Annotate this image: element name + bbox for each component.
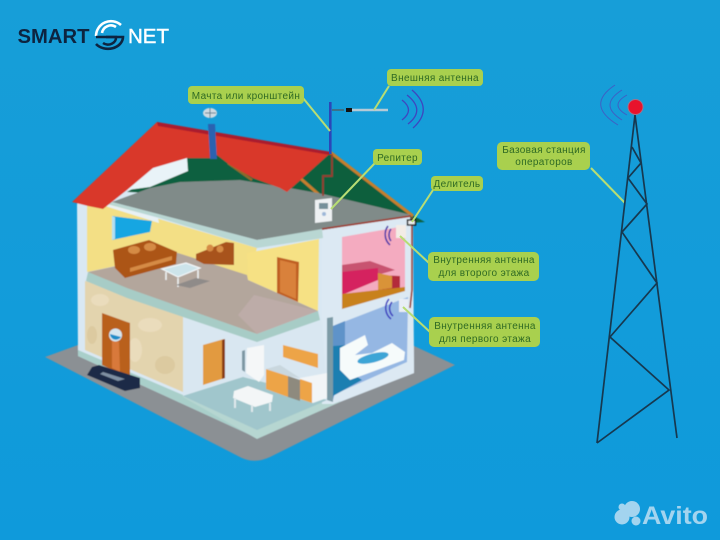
label: mast: Мачта или кронштейн [192,91,300,102]
splitter [408,220,416,225]
front steps [87,365,140,391]
logo: Smart Net: SMART [18,25,90,48]
label: mast [188,86,304,104]
stone wall texture [85,281,183,392]
upper wall door [277,257,299,302]
upper kitchen cabinet [283,345,318,368]
ceiling edge slab [107,202,323,248]
bathroom [333,297,408,400]
kitchen counter [266,365,327,403]
label: first floor antenna: Внутренняя антенна [434,321,536,332]
label: second floor antenna [428,252,539,281]
left wall strip of lower rooms [327,317,333,402]
lower room floor [183,377,327,430]
chimney/mast on roof [203,108,217,159]
sofa [113,240,177,278]
label: external antenna [387,69,483,86]
wifi icon: second floor [385,226,391,245]
cell tower [597,115,677,443]
external mast and antenna [329,102,388,154]
icon: logo G signal mark [96,21,123,49]
label: second floor antenna: для второго этажа [438,268,530,279]
icon: tower beacon [628,100,643,114]
wifi icon: tower signal [601,85,627,125]
lower room back walls [183,313,327,398]
armchair [196,242,234,265]
wifi icon: external antenna [402,90,423,128]
roof underside: attic [127,153,285,195]
label: base station [497,142,590,170]
watermark: Avito: Avito [642,502,708,530]
window [112,216,152,240]
label: repeater: Репитер [377,153,418,164]
coffee table [162,263,210,288]
label: splitter [431,176,483,191]
front door [102,313,130,378]
refrigerator [246,345,264,382]
right wall outer [322,216,414,404]
wifi icon: first floor [386,299,393,319]
indoor antenna first floor [399,299,408,312]
upper floor yellow walls [87,205,257,280]
roof rafters [330,152,413,216]
roof red [72,122,331,209]
logo: Smart Net: NET [128,25,169,48]
house silhouette [77,130,414,438]
label: base station: операторов [515,157,573,168]
bedroom [342,226,405,309]
watermark: Avito [614,501,708,530]
upper floor [88,253,318,334]
leader lines [303,86,625,332]
dining table [233,386,273,412]
label: second floor antenna: Внутренняя антенна [433,255,535,266]
label: external antenna: Внешняя антенна [391,73,479,84]
logo: Smart Net [18,21,169,49]
repeater [315,198,332,223]
label: first floor antenna [429,317,540,347]
house illustration [45,108,455,461]
mid slab [86,272,320,342]
lower interior door [203,339,225,385]
label: splitter: Делитель [434,179,480,190]
ground slab [45,345,455,461]
indoor antenna second floor [396,225,406,238]
label: base station: Базовая станция [502,145,586,156]
lower floor slab [78,350,340,438]
label: first floor antenna: для первого этажа [439,334,531,345]
ceiling grey [112,180,412,240]
cable [322,154,412,308]
label: repeater [373,149,422,165]
